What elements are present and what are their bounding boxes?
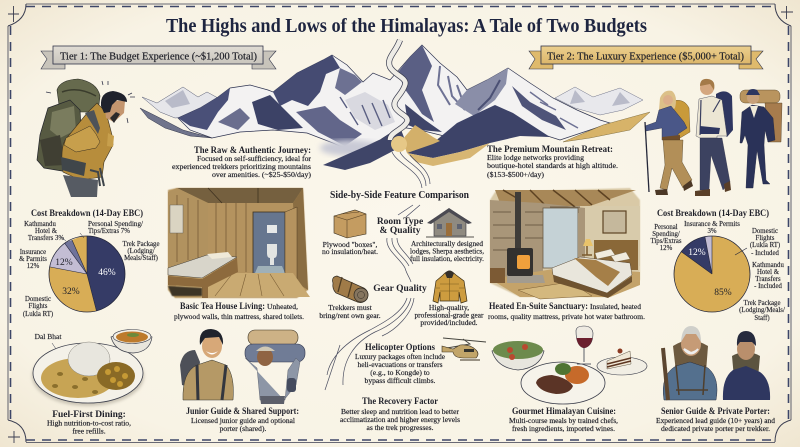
pie labels: luxury: 12% bbox=[660, 245, 673, 252]
icon: puffer jacket bbox=[433, 270, 467, 303]
text: gourmet himalayan cuisine bbox=[509, 407, 618, 433]
text: senior guide and private porter bbox=[656, 407, 775, 433]
pie chart: budget cost breakdown: 32% bbox=[62, 287, 80, 297]
title: The Highs and Lows of the Himalayas: A Tale of Two Budgets bbox=[166, 16, 647, 37]
pie labels: luxury: Domestic bbox=[752, 228, 778, 235]
text: architecturally designed lodges: Architecturally designed bbox=[411, 239, 483, 248]
text: gourmet himalayan cuisine: Gourmet Himalayan Cuisine: bbox=[512, 407, 616, 417]
text: room type and quality: Room Type bbox=[377, 217, 423, 227]
pie chart: budget cost breakdown: 12% bbox=[55, 258, 73, 268]
pie labels: budget: (Lukla RT) bbox=[23, 311, 53, 318]
cost breakdown title: budget: Cost Breakdown (14-Day EBC) bbox=[31, 208, 143, 219]
text: architecturally designed lodges: full insulation, electricity. bbox=[410, 254, 484, 263]
text: raw and authentic journey bbox=[172, 146, 311, 179]
pie labels: budget: Meals/Staff) bbox=[124, 255, 158, 262]
text: fuel-first dining: Fuel-First Dining: bbox=[52, 410, 126, 420]
icon: helicopter bbox=[442, 338, 486, 360]
text: trekkers own gear bbox=[319, 303, 381, 320]
text: junior guide and shared support: Junior Guide & Shared Support: bbox=[186, 407, 299, 417]
text: trekkers own gear: Trekkers must bbox=[328, 303, 373, 312]
ribbon: tier 2 heading: Tier 2: The Luxury Experience ($5,000+ Total) bbox=[547, 50, 744, 62]
icon: mountain lodge bbox=[426, 208, 474, 237]
pie labels: budget: & Parmits bbox=[19, 256, 47, 263]
hiker: tired budget trekker bbox=[37, 79, 135, 197]
pie chart: luxury cost breakdown bbox=[674, 236, 750, 312]
comparison heading: Side-by-Side Feature Comparison bbox=[330, 190, 469, 201]
pie labels: budget: Kathmandu bbox=[24, 221, 56, 228]
text: the recovery factor: Better sleep and nutrition lead to better bbox=[341, 407, 459, 416]
text: fuel-first dining bbox=[47, 410, 131, 436]
pie labels: luxury: Staff) bbox=[754, 315, 770, 322]
illustration: junior guide and shared porter bbox=[180, 329, 305, 404]
ribbon: tier 2 heading bbox=[529, 46, 763, 69]
text: the recovery factor: acclimatization and higher energy levels bbox=[340, 415, 460, 424]
pie labels: luxury: - Included bbox=[751, 250, 779, 257]
pie labels: budget: 12% bbox=[27, 263, 40, 270]
text: trekkers own gear: bring/rent own gear. bbox=[319, 311, 381, 320]
illustration: dal bhat plate bbox=[32, 330, 152, 406]
pie labels: luxury: Spending/ bbox=[652, 231, 680, 238]
text: architecturally designed lodges: lodges, Sherpa aesthetics, bbox=[410, 246, 484, 256]
text: the recovery factor: as the trek progresses. bbox=[366, 423, 434, 432]
pie labels: budget bbox=[19, 221, 159, 318]
text: helicopter options: Helicopter Options bbox=[365, 343, 435, 353]
text: premium mountain retreat bbox=[487, 145, 618, 179]
text: professional-grade gear: High-quality, bbox=[429, 303, 469, 312]
text: junior guide and shared support: porter (shared). bbox=[220, 424, 266, 433]
pie labels: luxury: - Included bbox=[754, 283, 782, 290]
illustration: heated en-suite room bbox=[490, 188, 640, 299]
text: gear quality: Gear Quality bbox=[373, 284, 427, 294]
text: premium mountain retreat: The Premium Mountain Retreat: bbox=[487, 145, 613, 155]
text: heated en-suite sanctuary bbox=[488, 301, 645, 321]
cost breakdown title: luxury: Cost Breakdown (14-Day EBC) bbox=[657, 208, 769, 219]
pie labels: luxury: Tips/Extras bbox=[650, 238, 682, 245]
pie chart: luxury cost breakdown: 85% bbox=[714, 288, 732, 298]
pie chart: budget cost breakdown bbox=[49, 236, 125, 312]
illustration: senior guide and private porter bbox=[663, 326, 770, 400]
text: senior guide and private porter: Experienced lead guide (10+ years) and bbox=[656, 416, 775, 425]
pie labels: luxury: (Lukla RT) bbox=[750, 242, 780, 249]
illustration: himalayan range with winding trail bbox=[140, 40, 650, 217]
text: basic tea house living: Basic Tea House Living: bbox=[180, 301, 265, 311]
text: gourmet himalayan cuisine: fresh ingredients, imported wines. bbox=[512, 424, 615, 433]
illustration: gourmet cuisine bbox=[492, 326, 647, 404]
text: helicopter options: (e.g., to Kongde) to bbox=[370, 368, 430, 377]
pie labels: luxury: 3% bbox=[707, 228, 717, 235]
text: room type and quality: & Quality bbox=[380, 226, 421, 236]
text: professional-grade gear: professional-grade gear bbox=[414, 310, 484, 320]
text: heated en-suite sanctuary: rooms, quality mattress, private hot water bathroom. bbox=[488, 312, 645, 321]
text: fuel-first dining: free refills. bbox=[72, 426, 106, 436]
pie labels: budget: Hotel & bbox=[35, 228, 58, 235]
text: professional-grade gear bbox=[414, 303, 484, 327]
text: heated en-suite sanctuary: Insulated, heated bbox=[590, 302, 641, 311]
text: professional-grade gear: provided/included. bbox=[420, 318, 478, 327]
pie labels: luxury: Personal bbox=[654, 224, 678, 231]
text: room type and quality bbox=[377, 217, 423, 236]
pie labels: luxury: Transfers bbox=[755, 276, 781, 283]
pie labels: luxury: Kathmandu bbox=[752, 262, 784, 269]
label: dal bhat: Dal Bhat bbox=[35, 332, 62, 341]
icon: cardboard box bbox=[334, 210, 366, 238]
pie labels: budget: Personal Spending/ bbox=[88, 221, 143, 228]
text: plywood boxes: Plywood "boxes", bbox=[323, 240, 377, 249]
pie labels: budget: Tips/Extras 7% bbox=[88, 228, 130, 235]
text: senior guide and private porter: dedicated private porter per trekker. bbox=[661, 424, 770, 433]
pie chart: luxury cost breakdown: 12% bbox=[688, 248, 706, 258]
winding path connectors bbox=[325, 238, 414, 390]
ribbon: tier 1 heading bbox=[41, 46, 276, 69]
text: senior guide and private porter: Senior Guide & Private Porter: bbox=[661, 407, 770, 417]
text: the recovery factor bbox=[340, 397, 460, 432]
text: heated en-suite sanctuary: Heated En-Suite Sanctuary: bbox=[489, 301, 588, 311]
pie labels: budget: Insurance bbox=[20, 249, 46, 256]
pie labels: luxury: Insurance & Permits bbox=[684, 221, 740, 228]
text: premium mountain retreat: boutique-hotel standards at high altitude. bbox=[487, 161, 618, 170]
text: raw and authentic journey: experienced trekkers prioritizing mountains bbox=[172, 162, 311, 171]
text: gourmet himalayan cuisine: Multi-course meals by trained chefs, bbox=[509, 416, 618, 425]
text: basic tea house living: plywood walls, thin mattress, shared toilets. bbox=[174, 312, 304, 321]
text: helicopter options bbox=[355, 343, 446, 385]
text: helicopter options: Luxury packages often include bbox=[355, 352, 446, 361]
text: basic tea house living bbox=[174, 301, 304, 321]
pie labels: luxury bbox=[650, 221, 785, 322]
illustration: basic tea house room bbox=[168, 188, 310, 298]
text: premium mountain retreat: ($153-$500+/day) bbox=[487, 170, 544, 179]
text: plywood boxes: no insulation/heat. bbox=[322, 247, 378, 256]
text: fuel-first dining: High nutrition-to-cost ratio, bbox=[47, 418, 131, 428]
pie labels: budget: Trek Package bbox=[123, 241, 159, 248]
pie chart: budget cost breakdown: 46% bbox=[98, 268, 116, 278]
pie labels: budget: (Lodging/ bbox=[127, 248, 155, 255]
text: architecturally designed lodges bbox=[410, 239, 484, 263]
text: raw and authentic journey: over amenities. (~$25-$50/day) bbox=[212, 170, 311, 179]
ribbon: tier 1 heading: Tier 1: The Budget Experience (~$1,200 Total) bbox=[60, 50, 257, 62]
pie labels: luxury: (Lodging/Meals/ bbox=[739, 307, 785, 314]
text: helicopter options: bypass difficult climbs. bbox=[365, 376, 436, 385]
text: plywood boxes bbox=[322, 240, 378, 256]
text: junior guide and shared support bbox=[186, 407, 299, 433]
pie labels: luxury: Trek Package bbox=[744, 300, 780, 307]
pie labels: budget: Flights bbox=[29, 303, 48, 310]
text: premium mountain retreat: Elite lodge networks providing bbox=[487, 153, 584, 162]
pie labels: luxury: Hotel & bbox=[757, 269, 780, 276]
text: raw and authentic journey: The Raw & Authentic Journey: bbox=[194, 146, 311, 156]
text: junior guide and shared support: Licensed junior guide and optional bbox=[191, 416, 295, 425]
icon: sleeping bag roll bbox=[332, 276, 368, 303]
pie labels: budget: Domestic bbox=[25, 296, 51, 303]
text: basic tea house living: Unheated, bbox=[267, 302, 298, 311]
pie labels: luxury: Flights bbox=[756, 235, 775, 242]
text: raw and authentic journey: Focused on self-sufficiency, ideal for bbox=[197, 154, 311, 163]
text: helicopter options: heli-evacuations or transfers bbox=[358, 360, 443, 369]
pie labels: budget: Transfers 3% bbox=[28, 235, 64, 242]
text: the recovery factor: The Recovery Factor bbox=[362, 397, 439, 407]
hikers: luxury trekking group bbox=[645, 79, 782, 196]
